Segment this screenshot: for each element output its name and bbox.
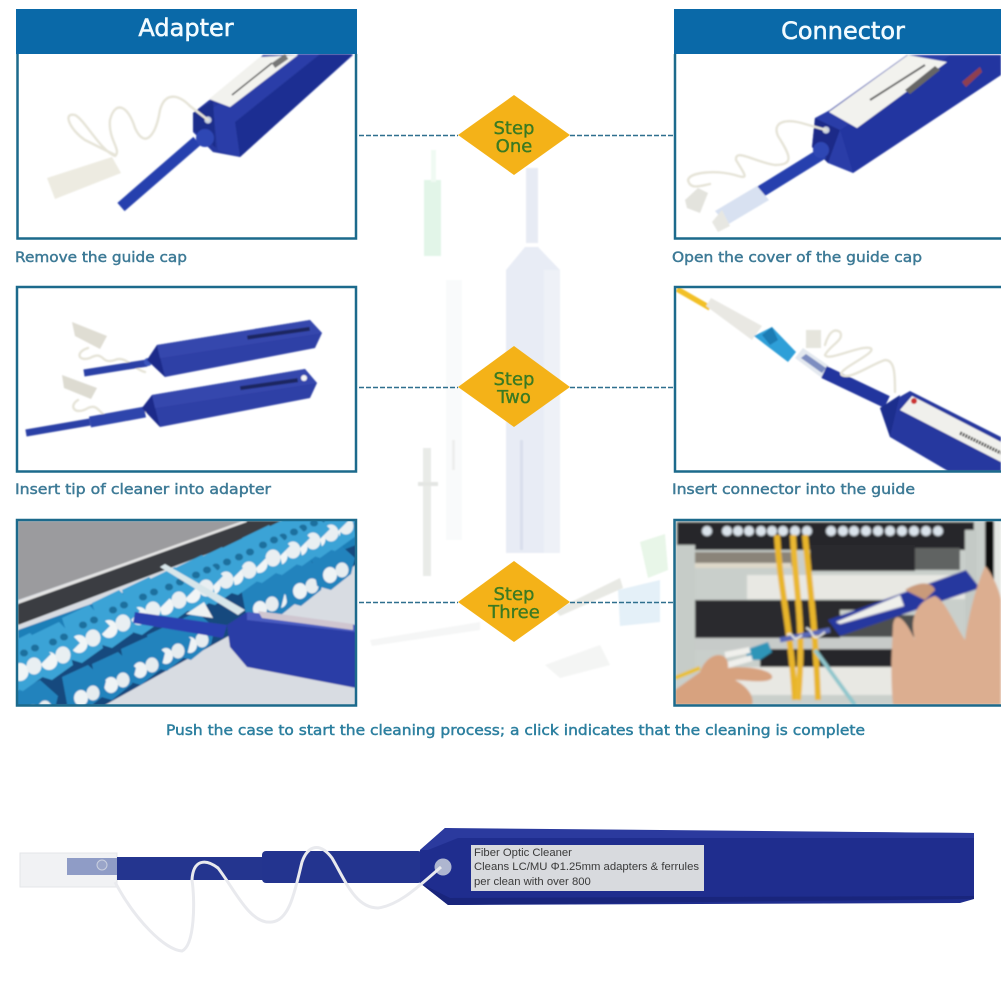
- badge: step three: [458, 561, 570, 642]
- panel: adapter step one: [16, 9, 357, 238]
- header: Adapter: Adapter: [138, 14, 234, 42]
- badge: step one: One: [496, 136, 532, 157]
- photo: two cleaners with retracted and extended tips: [26, 320, 322, 433]
- frame: [18, 54, 356, 238]
- clear guide cap: [20, 853, 117, 887]
- header: Connector: Connector: [781, 17, 905, 45]
- badge: step two: Two: [496, 387, 531, 408]
- instruction text: Push the case to start the cleaning process; a click indicates that the cleaning is complete: [166, 723, 865, 739]
- watermark: faded cleaner and parts: [370, 150, 668, 678]
- photo: cleaner with opened guide cap cover: [685, 55, 1001, 232]
- photo: cleaner in a patch panel of LC adapters: [18, 521, 355, 704]
- connector dashes: step one: [359, 134, 674, 136]
- panel: adapter step two: [17, 287, 356, 472]
- label: Cleans LC/MU Φ1.25mm adapters & ferrules: [474, 861, 699, 873]
- frame: [17, 287, 356, 472]
- panel: connector step three: [674, 520, 1001, 706]
- product photo: fiber optic cleaner: [20, 828, 974, 951]
- photo: cleaner with guide cap removed: [47, 54, 353, 207]
- frame: [17, 520, 356, 706]
- caption: open the cover: Open the cover of the guide cap: [672, 250, 922, 266]
- badge: step two: [458, 346, 570, 427]
- frame: [674, 520, 1001, 706]
- badge: step two: Step: [494, 369, 534, 390]
- label: Fiber Optic Cleaner: [474, 847, 572, 859]
- tether string: [115, 847, 441, 951]
- panel: connector step two: [675, 287, 1001, 472]
- label: per clean with over 800: [474, 876, 591, 888]
- header: Connector: [674, 9, 1001, 54]
- cleaner tip: [117, 857, 263, 880]
- header: Adapter: [16, 9, 357, 54]
- frame: [675, 54, 1001, 238]
- frame: [675, 287, 1001, 472]
- caption: insert tip: Insert tip of cleaner into adapter: [15, 482, 271, 498]
- badge: step three: Three: [487, 602, 540, 623]
- eyelet: [434, 858, 452, 876]
- panel: connector step one: [674, 9, 1001, 238]
- panel: adapter step three: [16, 518, 358, 707]
- caption: remove the guide cap: Remove the guide cap: [15, 250, 187, 266]
- caption: insert connector: Insert connector into the guide: [672, 482, 915, 498]
- cleaner body: [420, 828, 974, 905]
- photo: connector being inserted into the guide: [677, 289, 1001, 471]
- badge: step one: [458, 95, 570, 175]
- connector dashes: step three: [359, 602, 674, 604]
- photo: hands using the cleaner at a rack: [675, 521, 1001, 705]
- badge: step one: Step: [494, 118, 534, 139]
- badge: step three: Step: [494, 584, 534, 605]
- label: [471, 845, 704, 891]
- connector dashes: step two: [359, 386, 674, 388]
